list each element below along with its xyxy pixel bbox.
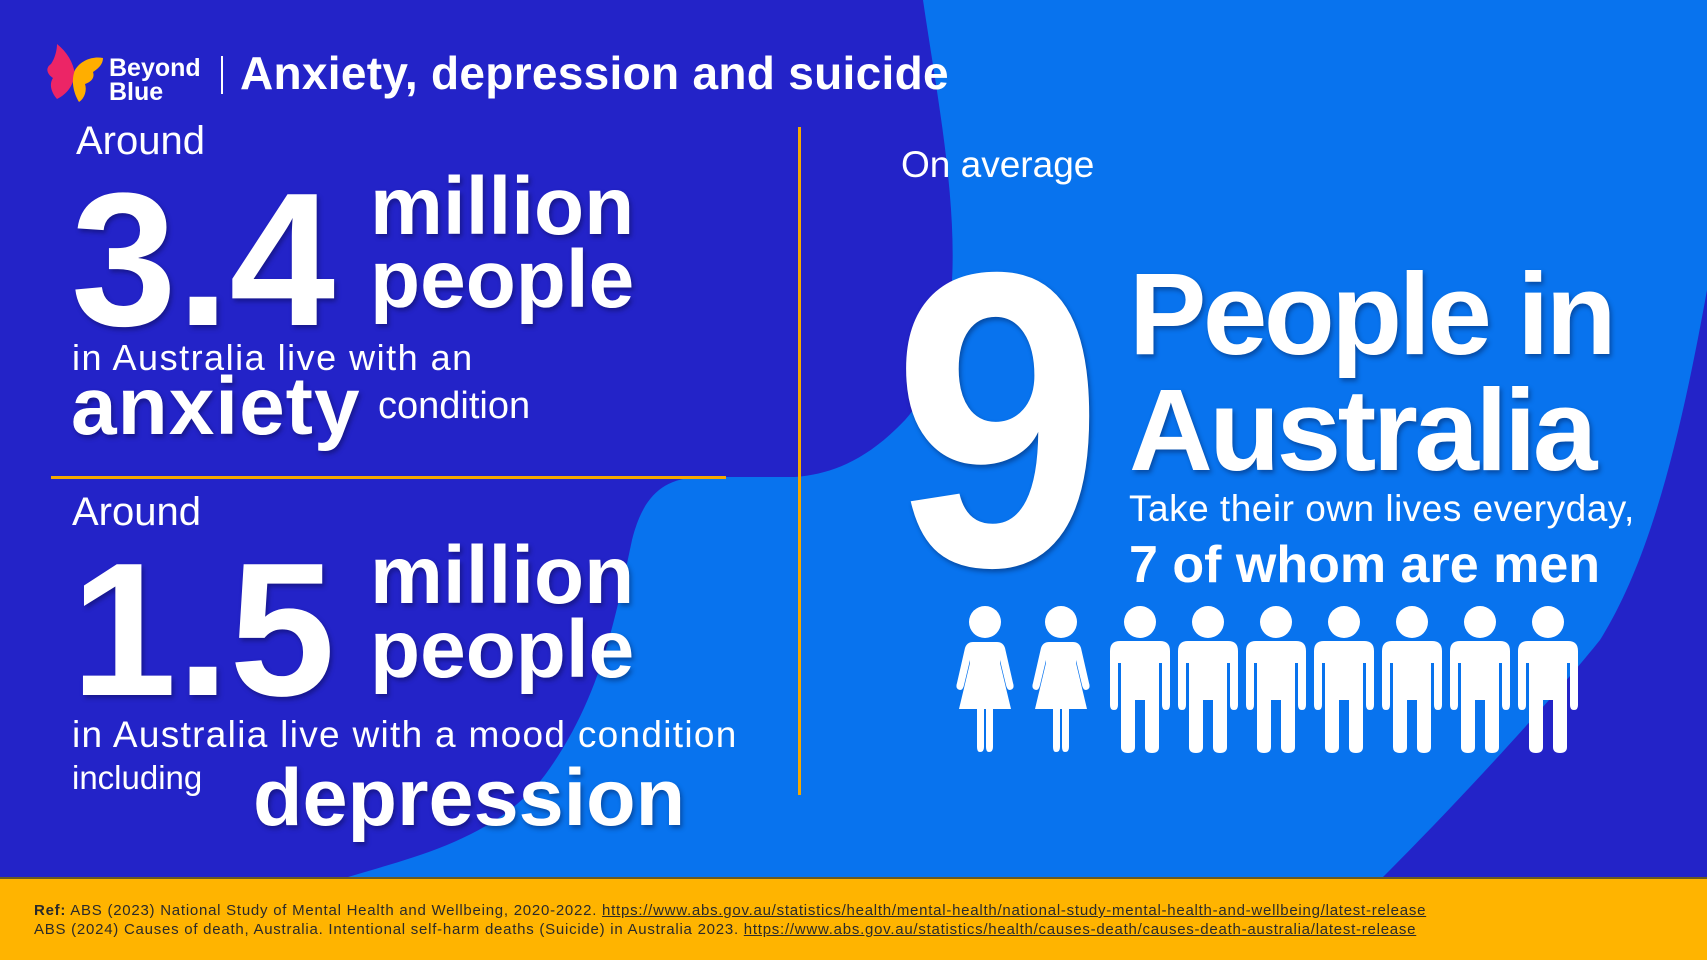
people in australia <box>1129 249 1614 495</box>
reference line 2: ABS (2024) Causes of death, Australia. Intentional self-harm deaths (Suicide) in Australia 2023. https://www.abs.gov.au/statistics/health/causes-death/causes-death-australia/latest-release <box>34 921 1416 938</box>
divider horizontal <box>51 476 726 479</box>
icon: man 1 <box>1110 606 1170 753</box>
number 3.4: 3.4 <box>71 154 335 366</box>
description: in Australia live with a mood condition <box>72 714 738 755</box>
footer references <box>0 877 1707 960</box>
7 of whom are men: 7 of whom are men <box>1129 536 1600 594</box>
panel: depression stat <box>71 490 738 848</box>
condition word: condition <box>378 385 530 427</box>
icon: man 2 <box>1178 606 1238 753</box>
million people: people <box>370 604 634 695</box>
including: including <box>72 759 202 796</box>
number 1.5: 1.5 <box>71 524 335 736</box>
title: Anxiety, depression and suicide <box>240 47 949 99</box>
icons: 9 people figures <box>956 606 1578 753</box>
label around: Around <box>76 119 205 163</box>
people in australia: Australia <box>1129 365 1594 495</box>
on average: On average <box>901 144 1094 185</box>
header logo <box>47 44 201 106</box>
icon: man 5 <box>1382 606 1442 753</box>
icon: woman 2 <box>1032 606 1090 752</box>
million people <box>370 161 636 330</box>
reference line 1: Ref: ABS (2023) National Study of Mental Health and Wellbeing, 2020-2022. https://www.abs.gov.au/statistics/health/mental-health/national-study-mental-health-and-wellbeing/latest-release <box>34 902 1426 919</box>
icon: man 3 <box>1246 606 1306 753</box>
panel: anxiety stat <box>71 119 636 456</box>
description: in Australia live with an <box>72 337 474 378</box>
depression word: depression <box>253 753 685 843</box>
icon: man 6 <box>1450 606 1510 753</box>
brand name: Blue <box>109 78 163 106</box>
million people: million <box>370 530 634 621</box>
panel: suicide stat <box>893 144 1635 655</box>
number 9: 9 <box>893 186 1103 655</box>
icon: butterfly <box>47 44 103 102</box>
anxiety word: anxiety <box>71 361 361 452</box>
take their own lives: Take their own lives everyday, <box>1129 488 1635 529</box>
icon: man 4 <box>1314 606 1374 753</box>
million people <box>370 530 636 700</box>
million people: million <box>370 161 634 252</box>
icon: man 7 <box>1518 606 1578 753</box>
icon: woman 1 <box>956 606 1014 752</box>
brand name <box>109 54 201 106</box>
people in australia: People in <box>1129 249 1613 379</box>
million people: people <box>370 234 634 325</box>
brand name: Beyond <box>109 54 201 82</box>
divider vertical <box>798 127 801 795</box>
label around: Around <box>72 490 201 534</box>
